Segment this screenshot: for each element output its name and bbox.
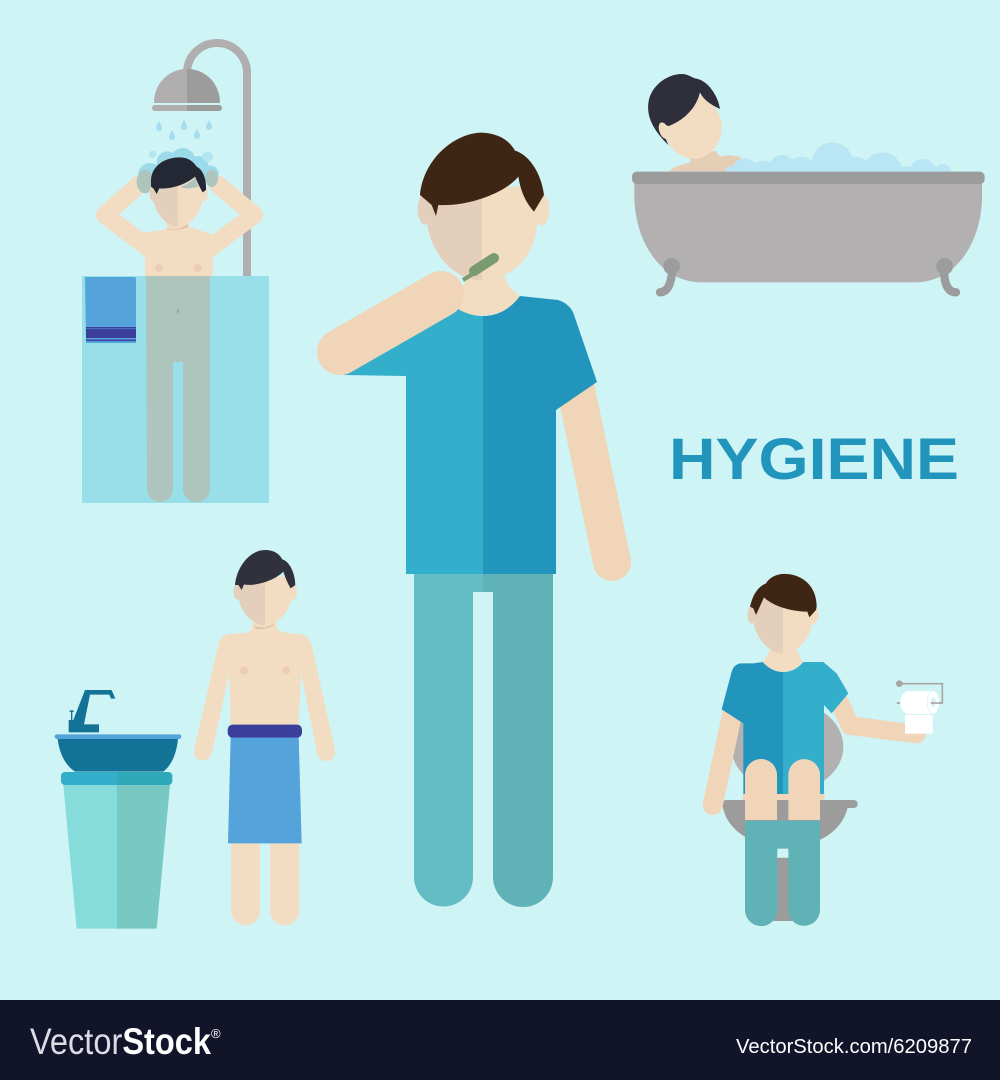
trousers	[745, 821, 820, 926]
shoulder	[668, 151, 742, 171]
towel	[228, 737, 302, 843]
toilet tank	[731, 702, 843, 792]
counter top	[61, 772, 172, 785]
water drops	[156, 120, 212, 140]
panel: brushing teeth man	[340, 133, 612, 907]
tub feet	[660, 267, 956, 292]
t-shirt	[722, 662, 848, 794]
tub rim	[632, 172, 985, 184]
face	[153, 177, 203, 227]
panel: man in towel	[194, 550, 335, 925]
face	[427, 187, 537, 281]
right arm	[575, 385, 612, 562]
legs	[231, 840, 299, 925]
panel: bathtub scene	[632, 74, 985, 292]
legs seen through glass	[146, 276, 210, 502]
head	[747, 574, 818, 653]
shower head	[152, 69, 222, 111]
registered mark: ®	[211, 1026, 221, 1041]
toilet base	[773, 858, 793, 921]
ears	[150, 185, 157, 202]
hands in foam	[137, 170, 218, 193]
toothbrush	[463, 258, 494, 280]
panel: sink scene	[55, 690, 181, 929]
foam	[138, 148, 219, 187]
knees	[745, 759, 820, 820]
toilet rim	[722, 800, 858, 808]
lap band	[743, 794, 825, 800]
panel: shower scene	[82, 43, 269, 503]
foam bubbles	[727, 142, 951, 192]
neck	[763, 647, 803, 672]
toilet paper holder	[896, 680, 942, 703]
showering man upper body	[105, 148, 254, 277]
ears	[418, 194, 432, 225]
toilet bowl	[722, 804, 848, 847]
arms	[713, 717, 732, 805]
bathing man head	[648, 74, 722, 159]
hair	[420, 133, 544, 216]
t-shirt	[343, 296, 597, 574]
watermark logo: VectorStock	[30, 1021, 211, 1062]
torso and arms	[194, 620, 335, 761]
trousers	[414, 574, 553, 907]
footer bar	[0, 1000, 1000, 1080]
pedestal	[63, 785, 170, 929]
raised arm	[340, 294, 441, 352]
basin	[58, 739, 178, 772]
head	[234, 550, 297, 625]
glass shower cabin	[82, 276, 269, 503]
neck	[452, 267, 523, 316]
torso	[142, 222, 213, 277]
towel	[85, 277, 136, 343]
panel: toilet scene	[713, 574, 942, 926]
hair	[151, 157, 206, 194]
towel band	[228, 725, 302, 738]
image id: VectorStock.com/6209877	[736, 1035, 972, 1058]
shower pipe	[187, 43, 247, 277]
toilet paper roll	[900, 691, 942, 734]
arms	[105, 185, 153, 252]
basin rim	[55, 734, 181, 739]
title: HYGIENE	[669, 427, 959, 492]
tub body	[634, 182, 982, 282]
faucet	[69, 690, 115, 732]
